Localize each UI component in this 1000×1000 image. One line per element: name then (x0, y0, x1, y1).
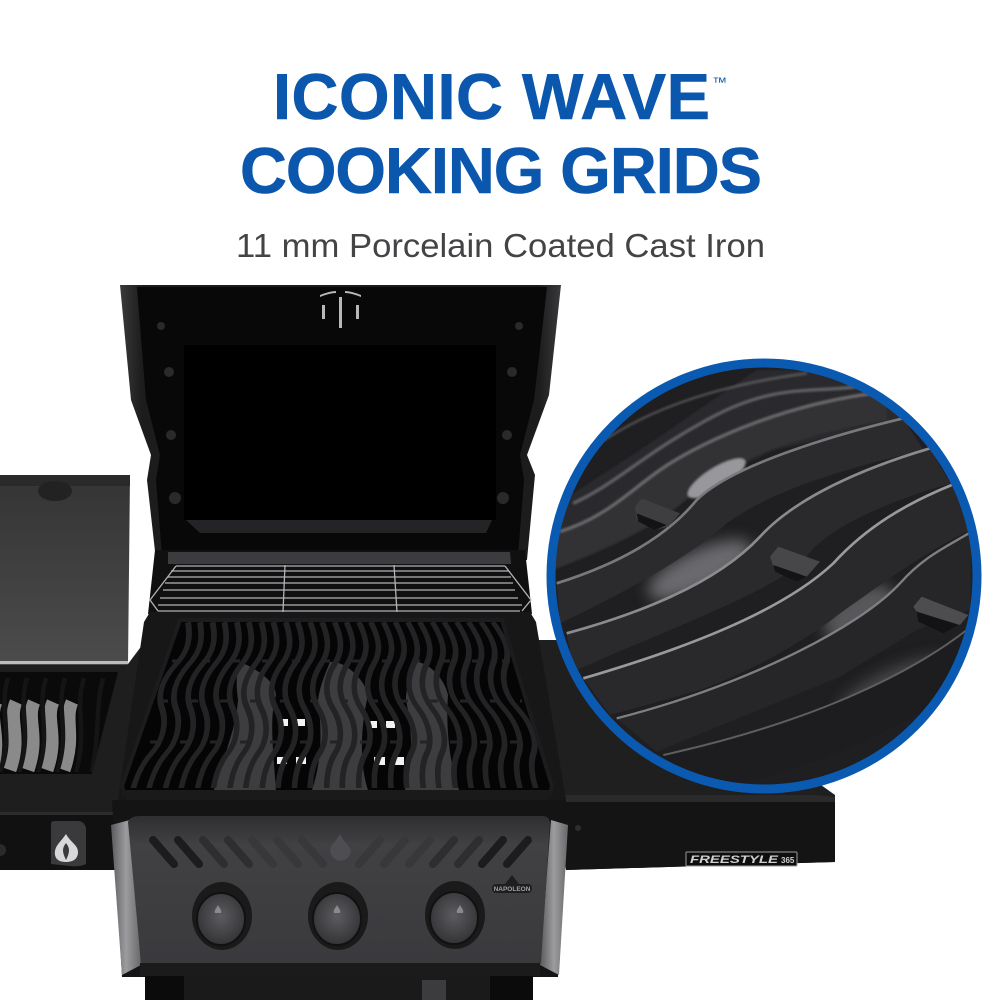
wavy grate bars (133, 622, 550, 788)
lens ring (551, 363, 977, 789)
warming rack (150, 565, 531, 612)
title: ICONIC WAVE (273, 60, 710, 133)
wave bar 3 (583, 485, 970, 715)
cart base (145, 976, 533, 1000)
burner light gaps (277, 719, 404, 765)
upper blurred bars (550, 370, 923, 570)
Freestyle badge (686, 852, 797, 866)
side burner ignition button (51, 821, 86, 866)
front panel (128, 816, 550, 963)
wave bar 4 (826, 590, 900, 646)
zoom lens: wave grid close-up (540, 350, 990, 800)
vent slots (153, 840, 528, 864)
grate frame (122, 620, 552, 794)
Napoleon logo: NAPOLEON (494, 886, 531, 893)
wave bar 5 (834, 650, 953, 724)
subtitle: 11 mm Porcelain Coated Cast Iron (236, 227, 765, 264)
control knobs (192, 881, 485, 950)
lit grill floor highlights (641, 532, 934, 700)
right side shelf (533, 640, 835, 870)
cross bar stubs (635, 498, 680, 530)
flame tamers (214, 662, 459, 790)
left side burner (0, 475, 146, 870)
title: COOKING GRIDS (240, 134, 762, 207)
Napoleon logo (492, 875, 532, 893)
title (240, 60, 762, 207)
wave bar 1 (557, 418, 923, 623)
open grill lid (120, 285, 561, 614)
thermometer mount (320, 291, 361, 328)
Freestyle badge: FREESTYLE (690, 854, 779, 866)
control panel (111, 800, 568, 977)
rack backdrop (148, 550, 532, 614)
firebox (118, 612, 566, 800)
grate cross bars (150, 661, 532, 742)
side burner grate (0, 672, 118, 774)
flame emblem (330, 834, 351, 861)
lid hinge rivets (157, 322, 523, 504)
title: ™ (712, 74, 727, 90)
side shelf body (0, 640, 146, 870)
wave bar 2 (567, 448, 950, 672)
side burner lid (0, 475, 130, 665)
stainless side trims (111, 820, 141, 975)
side burner front panel (0, 812, 118, 870)
cooking grate tray (122, 620, 552, 796)
Freestyle badge: 365 (781, 856, 795, 865)
